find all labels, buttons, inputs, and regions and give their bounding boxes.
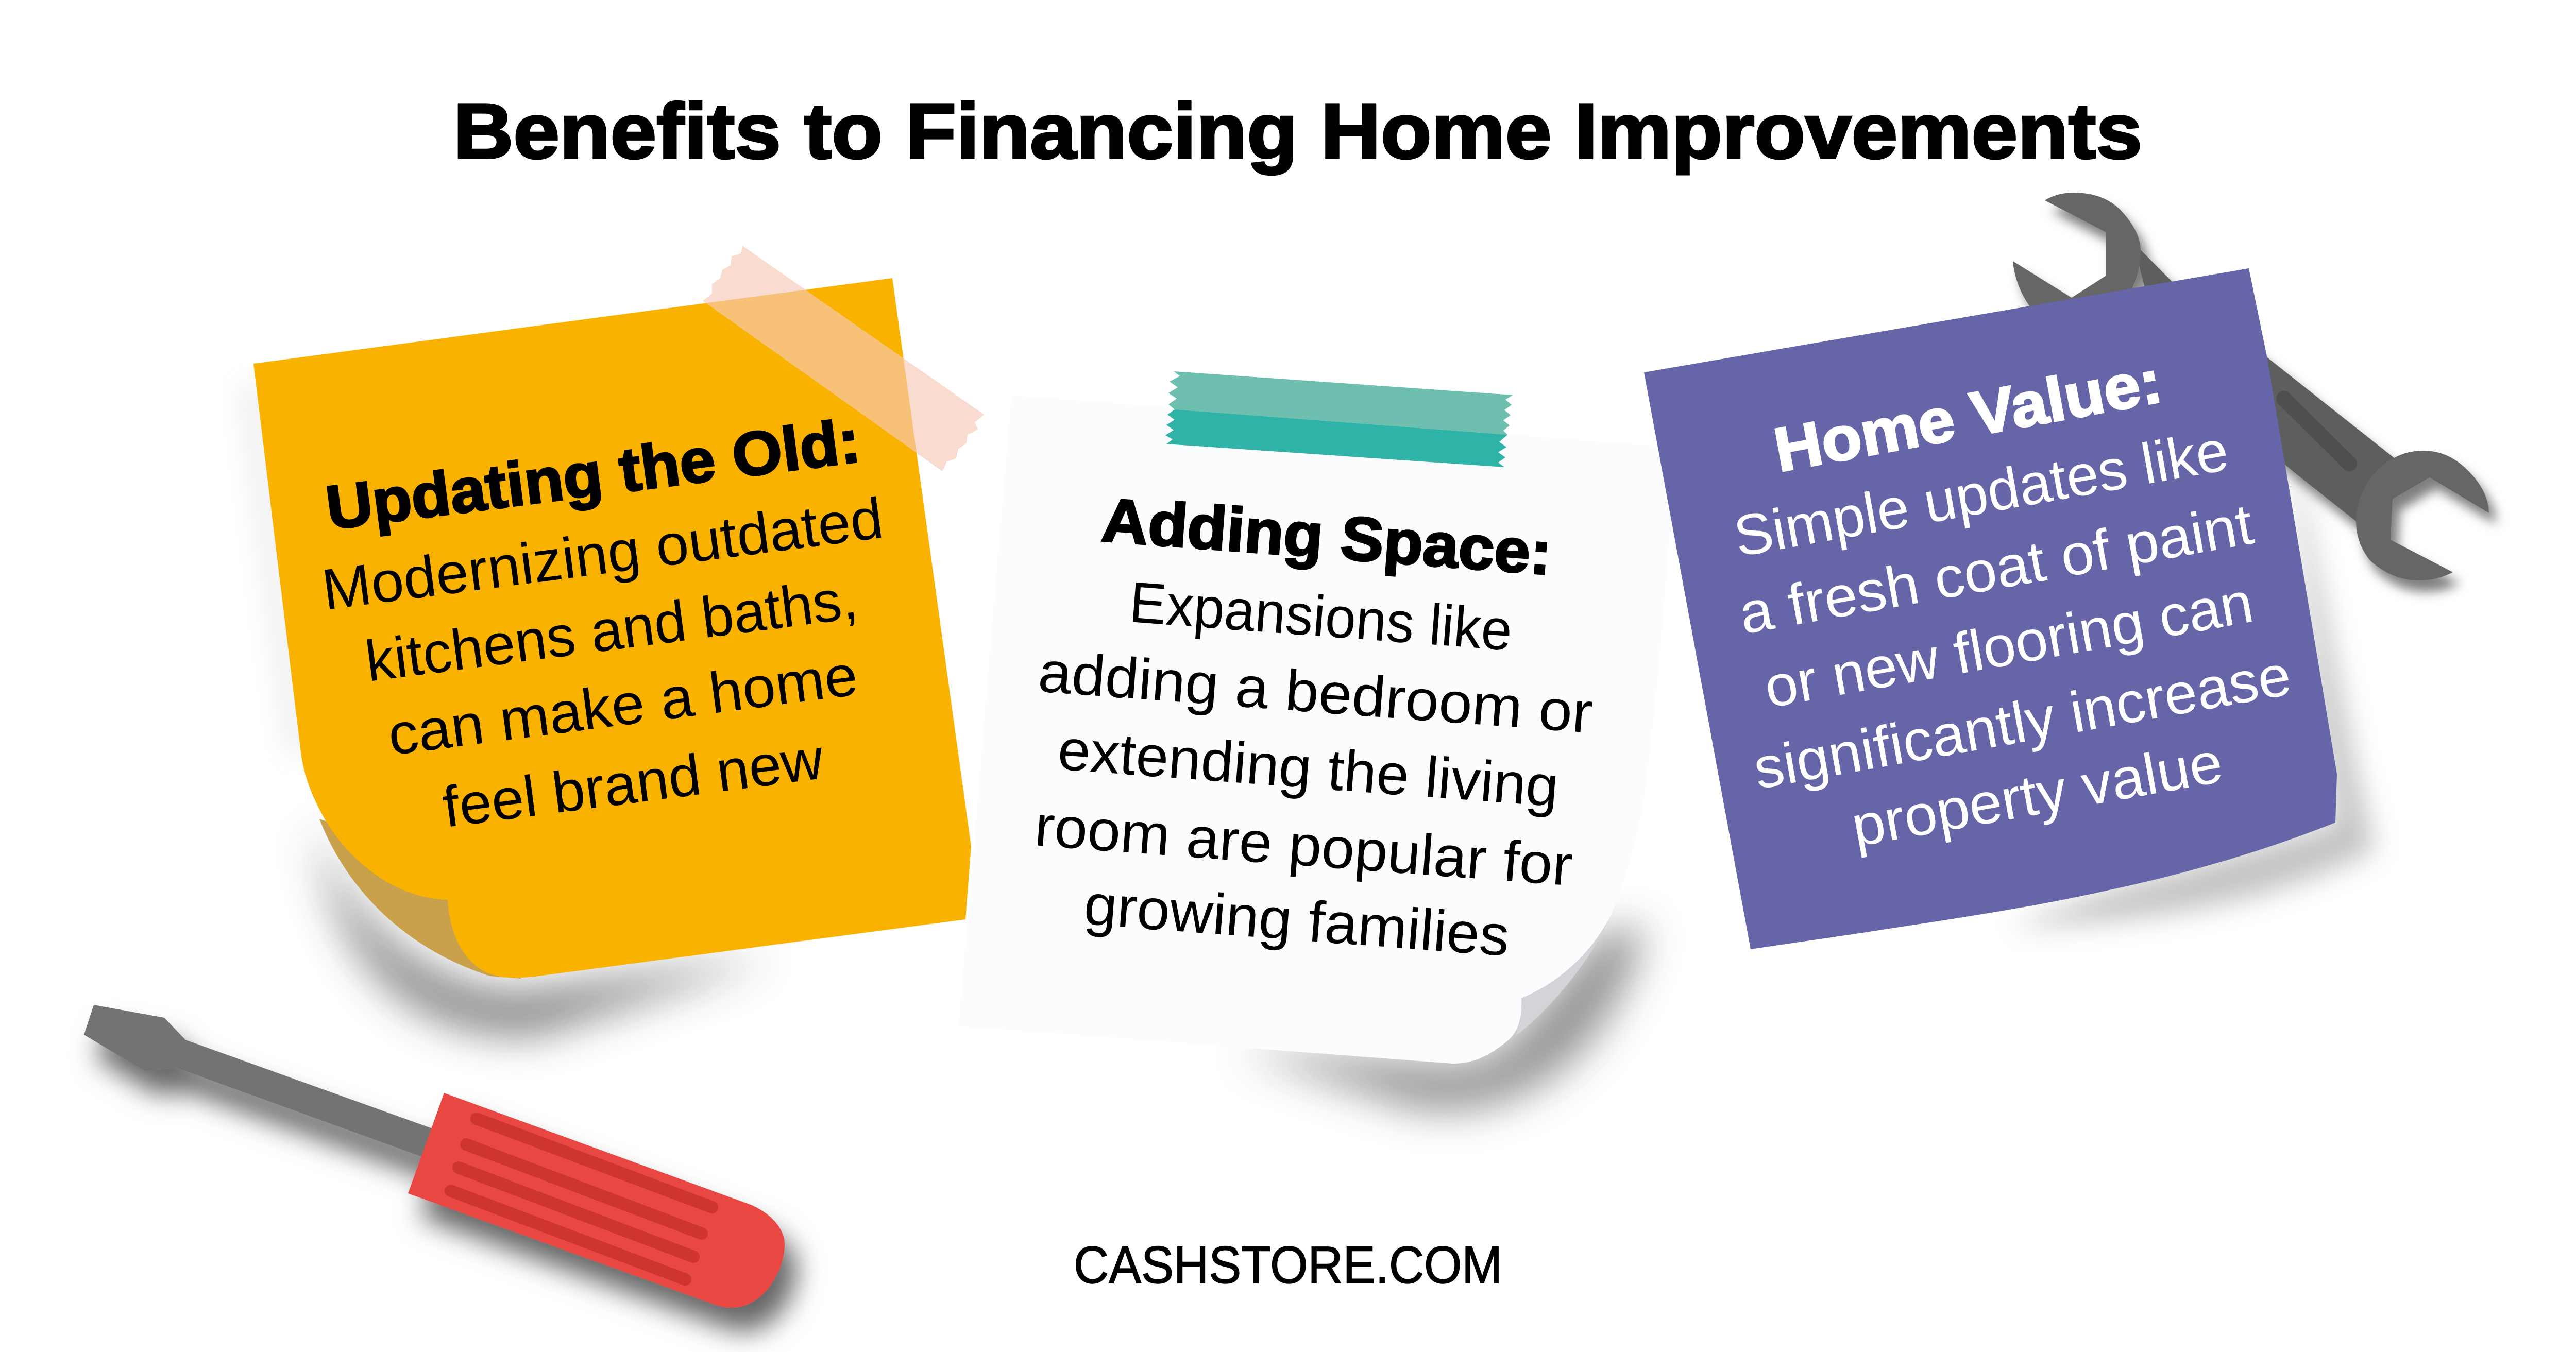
wrench handle	[2133, 242, 2394, 536]
note heading: Adding Space:	[1099, 485, 1554, 588]
panel: home value	[1644, 268, 2375, 949]
note shadow	[2009, 412, 2375, 927]
tape	[703, 246, 984, 471]
note body: Expansions like	[1127, 570, 1514, 663]
note body: feel brand new	[439, 726, 827, 840]
note shadow	[1236, 927, 1646, 1110]
wrench groove	[2284, 399, 2349, 464]
yellow note	[253, 278, 971, 978]
panel: updating the old	[247, 246, 984, 1035]
note body: property value	[1846, 730, 2227, 859]
note body: or new flooring can	[1759, 570, 2258, 720]
purple note	[1644, 268, 2337, 949]
icon: wrench	[2013, 193, 2489, 580]
note body: can make a home	[384, 643, 861, 767]
wrench bottom head	[2356, 451, 2489, 580]
note body	[1032, 570, 1595, 968]
title: Benefits to Financing Home Improvements	[453, 88, 2142, 175]
left edge shadow	[247, 381, 301, 752]
note body: kitchens and baths,	[362, 566, 861, 694]
note body: Modernizing outdated	[318, 486, 887, 622]
footer: website: CASHSTORE.COM	[1074, 1236, 1502, 1294]
note body	[1729, 418, 2296, 859]
tape upper band	[1168, 371, 1513, 435]
note shadow	[314, 819, 773, 1035]
wrench top head	[2013, 193, 2141, 319]
note body: Simple updates like	[1729, 418, 2233, 569]
icon: screwdriver	[84, 1005, 785, 1308]
screwdriver shaft	[84, 1005, 438, 1159]
curled corner	[319, 819, 521, 979]
tape lower band	[1165, 409, 1507, 467]
note body	[318, 486, 887, 840]
curled corner	[1516, 921, 1608, 1035]
handle ribs	[451, 1119, 712, 1279]
note body: room are popular for	[1032, 793, 1575, 898]
note heading: Updating the Old:	[322, 406, 864, 543]
screwdriver handle	[408, 1093, 785, 1308]
note body: adding a bedroom or	[1036, 639, 1595, 745]
green tape	[1165, 371, 1513, 467]
note heading: Home Value:	[1769, 346, 2167, 485]
note body: significantly increase	[1749, 642, 2296, 801]
note body: extending the living	[1056, 717, 1561, 819]
note body: a fresh coat of paint	[1734, 491, 2258, 646]
note body: growing families	[1082, 872, 1512, 968]
panel: adding space	[959, 371, 1674, 1110]
white note	[959, 395, 1674, 1064]
